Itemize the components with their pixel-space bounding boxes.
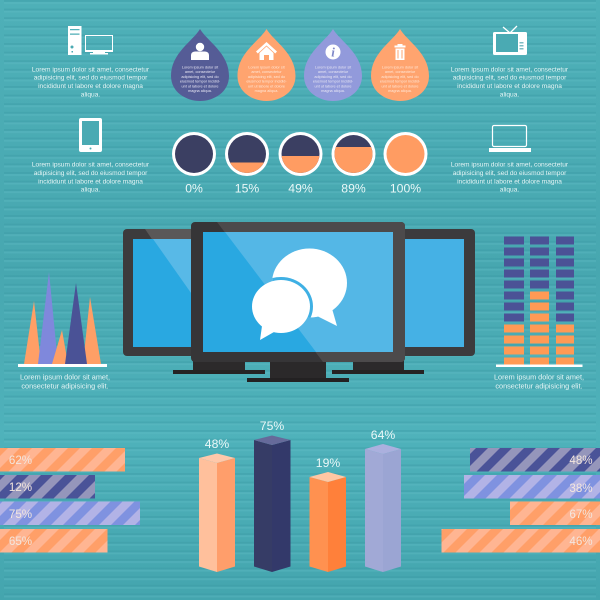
bar: 75% left: 75% [9, 508, 32, 521]
bar: 46% right: 46% [569, 535, 593, 548]
equalizer caption: Lorem ipsum dolor sit amet, [494, 372, 584, 382]
drop text: info: amet, consectetur [318, 70, 349, 74]
icon: tablet [79, 118, 102, 152]
text block: top right: Lorem ipsum dolor sit amet, consectetur [451, 66, 569, 73]
bar: 48% right [470, 448, 600, 472]
bar: 38% right [464, 475, 600, 498]
text block: top left: adipisicing elit, sed do eiusmod tempor [34, 75, 148, 82]
bar: 62% left [0, 448, 125, 472]
gauge: 100%: 100% [390, 182, 421, 196]
drop text: user: unt ut labore et dolore [182, 84, 218, 88]
text block: top left: aliqua. [81, 92, 100, 98]
drop text: user: eiusmod tempor incidid- [180, 80, 221, 84]
3D bar: 75% [254, 419, 290, 572]
drop: trash [371, 29, 429, 101]
monitor: center [191, 222, 405, 382]
bar: 12% left: 12% [9, 481, 32, 494]
text block: middle right: incididunt ut labore et dolore magna [457, 178, 562, 185]
drop text: info: adipisicing elit, sed do [314, 75, 352, 79]
3D bar: 19% [310, 456, 346, 572]
drop: user [171, 29, 229, 101]
bar: 75% left [0, 502, 140, 525]
equalizer chart [494, 236, 584, 390]
drop text: user: amet, consectetur [185, 70, 216, 74]
drop text: home: unt ut labore et dolore [248, 84, 285, 88]
monitor: right [332, 229, 475, 374]
gauge: 89%: 89% [341, 182, 366, 196]
equalizer caption: consectetur adipisicing elit. [495, 382, 583, 390]
icon: house [256, 42, 277, 60]
icon: laptop [489, 126, 531, 152]
3D bar: 75%: 75% [260, 419, 284, 433]
bar: 65% left [0, 529, 108, 552]
text block: top right: incididunt ut labore et dolore magna [457, 83, 562, 90]
bar: 46% right [442, 529, 600, 552]
text block: top right: adipisicing elit, sed do eiusmod tempor [453, 75, 567, 82]
bar: 62% left: 62% [9, 454, 32, 467]
bar: 38% right: 38% [569, 482, 593, 495]
gauge: 15% [225, 132, 269, 196]
3D bar: 64% [365, 428, 401, 572]
icon: desktop computer [68, 26, 113, 55]
text block: top right: aliqua. [500, 92, 519, 98]
gauge: 49% [278, 132, 322, 196]
drop text: user: adipisicing elit, sed do [181, 75, 219, 79]
gauge: 15%: 15% [235, 182, 259, 196]
text block: middle left: Lorem ipsum dolor sit amet, consectetur [32, 162, 150, 168]
drop text: info [313, 66, 354, 93]
spike chart caption: consectetur adipisicing elit. [21, 382, 109, 390]
gauge: 0%: 0% [185, 182, 203, 196]
text block: middle right [451, 162, 569, 194]
icon: trash bin [394, 44, 406, 60]
drop: home [238, 29, 296, 101]
drop text: home: eiusmod tempor incidid- [246, 80, 287, 84]
3D bar: 64%: 64% [371, 428, 395, 442]
drop text: trash: amet, consectetur [385, 70, 416, 74]
equalizer caption [494, 372, 584, 390]
drop text: home: adipisicing elit, sed do [248, 75, 285, 79]
text block: top right [451, 66, 569, 98]
text block: top left: Lorem ipsum dolor sit amet, consectetur [32, 66, 150, 73]
drop: info [304, 29, 362, 101]
drop text: user: Lorem ipsum dolor sit [182, 66, 219, 70]
drop text: home: magna aliqua. [255, 89, 278, 93]
bar: 67% right: 67% [569, 508, 593, 521]
drop text: trash: Lorem ipsum dolor sit [382, 66, 419, 70]
gauge: 0% [172, 132, 216, 196]
drop text: user [180, 66, 221, 93]
3D bar: 48% [199, 437, 235, 572]
bar: 48% right: 48% [569, 454, 593, 467]
icon: television [493, 26, 527, 55]
drop text: trash: magna aliqua. [388, 89, 412, 93]
drop text: info: eiusmod tempor incidid- [313, 80, 354, 84]
monitor: left [123, 229, 265, 374]
spike chart caption [20, 372, 110, 390]
drop text: info: magna aliqua. [321, 89, 345, 93]
drop text: home: Lorem ipsum dolor sit [248, 66, 286, 70]
icon: info: i [331, 44, 335, 60]
bar: 67% right [510, 502, 600, 525]
text block: middle left: adipisicing elit, sed do eiusmod tempor [34, 170, 148, 177]
drop text: trash: eiusmod tempor incidid- [380, 80, 421, 84]
3D bar: 48%: 48% [205, 437, 229, 451]
drop text: home: amet, consectetur [251, 70, 282, 74]
icon: speech bubbles [249, 248, 347, 340]
bar: 12% left [0, 475, 95, 498]
drop text: user: magna aliqua. [188, 89, 212, 93]
gauge: 89% [332, 132, 376, 196]
3D bar: 19%: 19% [316, 456, 340, 470]
drop text: info: unt ut labore et dolore [315, 84, 351, 88]
text block: middle left: aliqua. [81, 187, 100, 194]
gauge: 49%: 49% [288, 182, 313, 196]
drop text: info: Lorem ipsum dolor sit [315, 66, 352, 70]
spike chart caption: Lorem ipsum dolor sit amet, [20, 372, 110, 382]
text block: middle right: aliqua. [500, 187, 519, 194]
text block: middle right: adipisicing elit, sed do eiusmod tempor [453, 170, 567, 177]
drop text: trash [380, 66, 421, 93]
icon: user [191, 43, 209, 60]
text block: middle left [32, 162, 150, 194]
bar: 65% left: 65% [9, 535, 32, 548]
text block: top left [32, 66, 150, 98]
drop text: trash: unt ut labore et dolore [382, 84, 418, 88]
text block: top left: incididunt ut labore et dolore magna [38, 83, 143, 90]
text block: middle left: incididunt ut labore et dolore magna [38, 178, 143, 185]
gauge: 100% [384, 132, 428, 196]
drop text: home [246, 66, 287, 93]
text block: middle right: Lorem ipsum dolor sit amet, consectetur [451, 162, 569, 168]
drop text: trash: adipisicing elit, sed do [381, 75, 419, 79]
spike chart [18, 272, 110, 390]
